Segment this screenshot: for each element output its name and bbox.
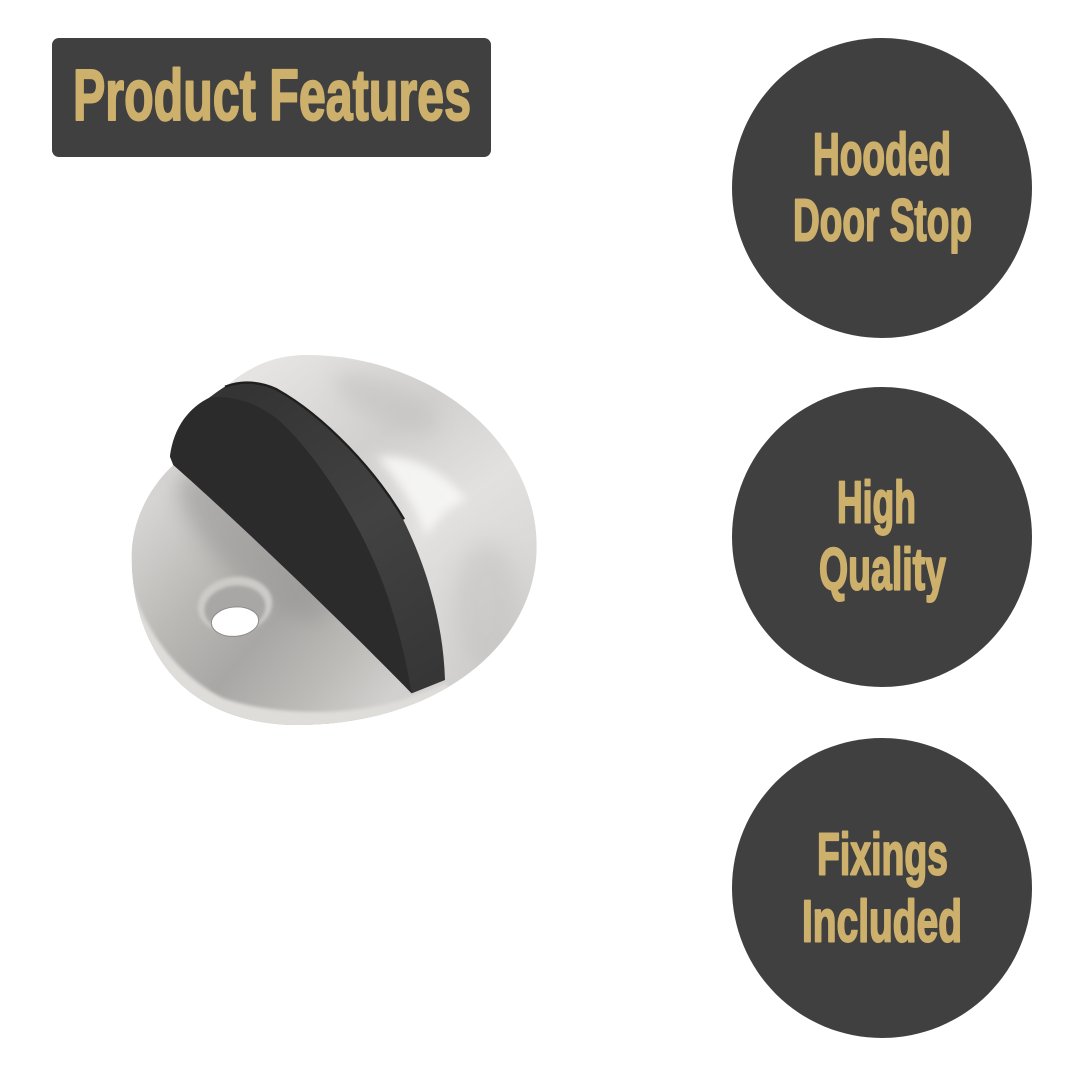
rubber top edge — [225, 383, 404, 519]
feature circle: High Quality: High — [837, 470, 916, 536]
title badge: Product Features: Product Features — [73, 56, 471, 136]
feature circle: Fixings Included — [732, 738, 1032, 1038]
feature circle: High Quality — [732, 387, 1032, 687]
feature circle: Fixings Included: Included — [802, 888, 962, 954]
metal body — [132, 355, 536, 725]
rubber inner face — [170, 397, 412, 693]
feature circle: High Quality: Quality — [819, 536, 946, 602]
product photo: hooded door stop — [132, 355, 536, 725]
base plate — [132, 465, 452, 725]
feature circle: Hooded Door Stop — [732, 38, 1032, 338]
dome shading — [456, 548, 514, 659]
feature circle: Fixings Included: Fixings — [817, 822, 948, 888]
screw hole — [210, 605, 260, 638]
feature circle: Hooded Door Stop: Hooded — [813, 122, 951, 188]
title badge: Product Features — [52, 38, 491, 157]
screw hole countersink — [194, 572, 276, 638]
feature circle: Hooded Door Stop: Door Stop — [793, 188, 972, 254]
rubber bumper — [170, 383, 445, 693]
base plate rim — [136, 596, 448, 725]
